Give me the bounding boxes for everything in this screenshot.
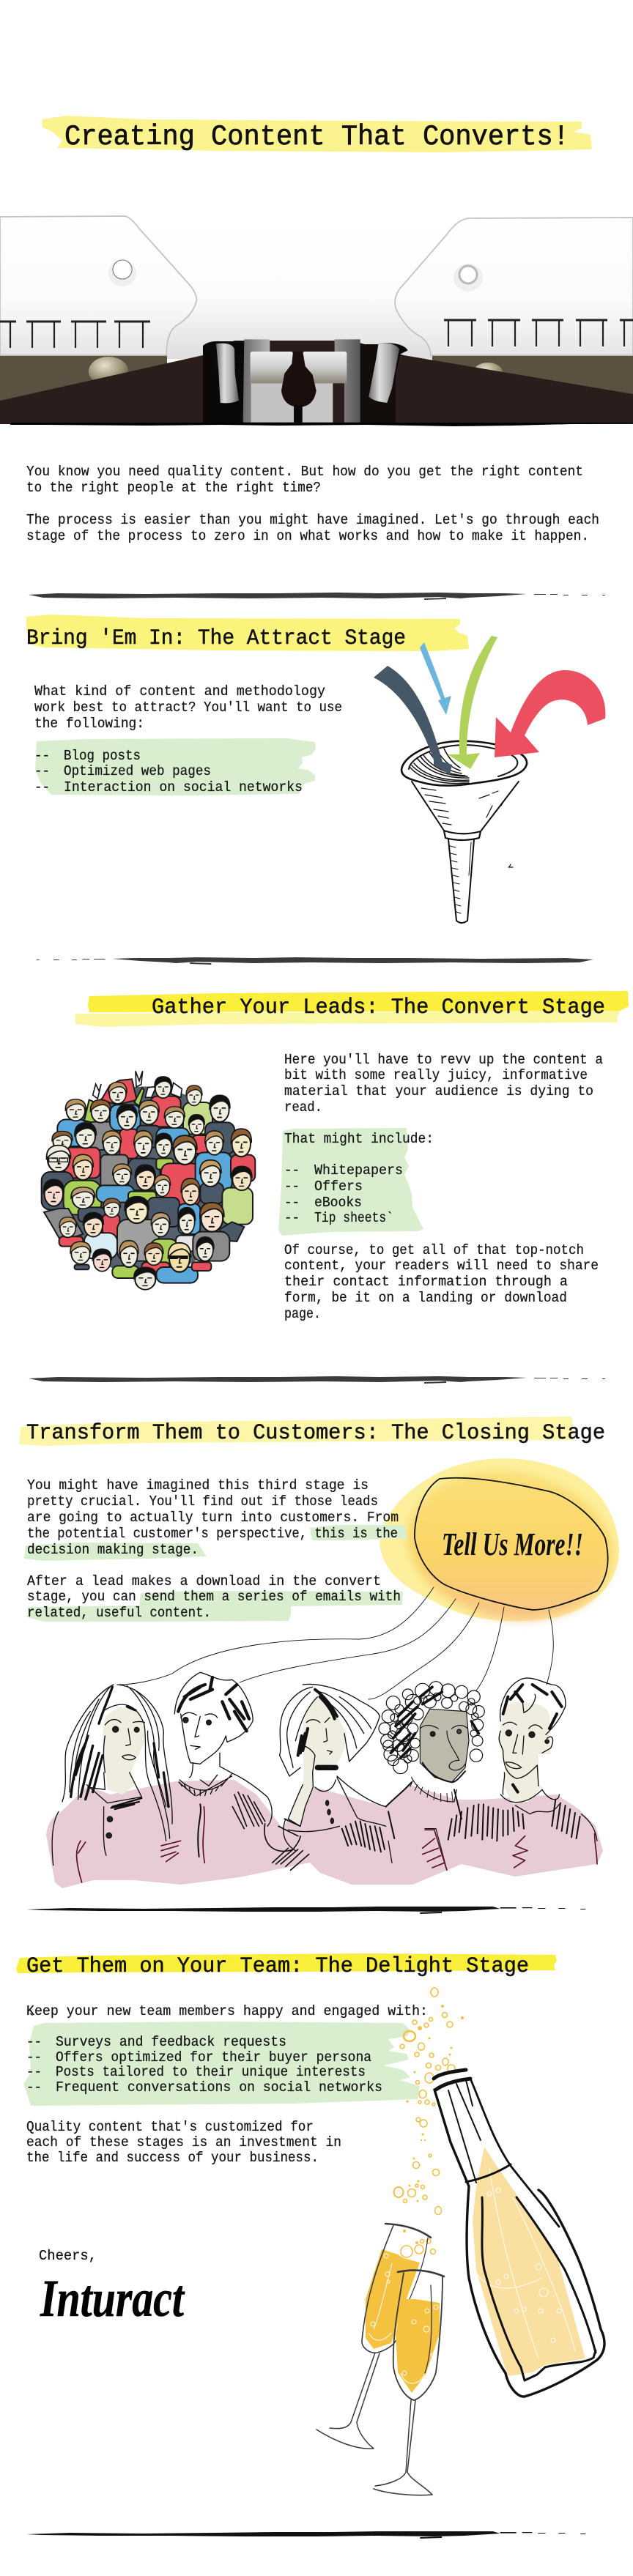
convert closing text: their contact information through a bbox=[284, 1274, 568, 1290]
torn bottom edge bbox=[10, 423, 633, 426]
person 4 bbox=[379, 1682, 484, 1870]
delight list: Offers optimized for their buyer persona bbox=[56, 2049, 371, 2065]
intro text bbox=[26, 464, 599, 544]
convert intro text: bit with some really juicy, informative bbox=[284, 1067, 588, 1083]
connecting lines bbox=[119, 1587, 553, 1699]
arrow: green bbox=[448, 636, 497, 769]
ink ribbon bbox=[0, 341, 633, 424]
heading: closing stage: Transform Them to Customers: The Closing Stage bbox=[26, 1421, 605, 1446]
typewriter photo bbox=[0, 216, 633, 426]
closing intro text bbox=[24, 1477, 407, 1622]
convert intro text: Here you'll have to revv up the content a bbox=[284, 1052, 603, 1068]
group of people bbox=[46, 1587, 603, 1888]
heading: delight stage: Get Them on Your Team: The Delight Stage bbox=[26, 1954, 529, 1979]
convert closing text: content, your readers will need to share bbox=[284, 1258, 599, 1274]
attract list: -- bbox=[34, 763, 50, 779]
glass: back bbox=[316, 2224, 431, 2449]
convert list: Whitepapers bbox=[314, 1162, 403, 1178]
convert list: eBooks bbox=[314, 1195, 362, 1211]
title text: Creating Content That Converts! bbox=[64, 121, 569, 153]
panel: closing stage bbox=[19, 1417, 619, 1888]
sign-off bbox=[39, 2248, 185, 2328]
arrow: red bbox=[495, 670, 605, 757]
closing intro text: After a lead makes a download in the convert bbox=[27, 1573, 381, 1589]
heading: convert stage bbox=[75, 991, 629, 1027]
person 1 bbox=[52, 1685, 181, 1882]
convert closing text: form, be it on a landing or download bbox=[284, 1290, 567, 1306]
delight closing text: each of these stages is an investment in bbox=[26, 2134, 341, 2150]
person 2 bbox=[174, 1672, 300, 1863]
intro text: The process is easier than you might have imagined. Let's go through each bbox=[26, 512, 599, 528]
convert intro text: read. bbox=[284, 1099, 322, 1116]
attract intro text: the following: bbox=[34, 716, 144, 732]
champagne bubbles bbox=[394, 1988, 464, 2257]
intro text: to the right people at the right time? bbox=[26, 480, 321, 496]
panel: attract stage bbox=[26, 615, 605, 923]
arrow: light blue bbox=[420, 642, 451, 715]
arrow: dark blue bbox=[374, 666, 452, 775]
closing intro text: are going to actually turn into customers. From bbox=[27, 1510, 399, 1526]
convert closing text: Of course, to get all of that top-notch bbox=[284, 1242, 584, 1258]
convert list: That might include: bbox=[284, 1131, 434, 1147]
convert closing text bbox=[284, 1242, 599, 1322]
delight list: Frequent conversations on social networks bbox=[56, 2079, 382, 2096]
delight list: Surveys and feedback requests bbox=[56, 2034, 286, 2050]
sign-off: Cheers, bbox=[39, 2248, 97, 2264]
title bbox=[42, 116, 592, 153]
person 3 bbox=[280, 1684, 392, 1863]
convert intro text: material that your audience is dying to bbox=[284, 1083, 593, 1099]
intro text: stage of the process to zero in on what works and how to make it happen. bbox=[26, 528, 589, 544]
attract list: -- bbox=[34, 779, 50, 795]
convert list bbox=[278, 1128, 434, 1236]
right paper guide plate bbox=[395, 218, 633, 355]
panel: convert stage bbox=[42, 991, 629, 1322]
convert list: -- bbox=[284, 1210, 300, 1226]
delight list: -- bbox=[26, 2049, 42, 2065]
delight closing text: the life and success of your business. bbox=[26, 2150, 319, 2166]
intro text: You know you need quality content. But how do you get the right content bbox=[26, 464, 583, 480]
attract list: Optimized web pages bbox=[64, 763, 211, 779]
title highlight bbox=[42, 116, 592, 152]
logo wordmark: Inturact bbox=[40, 2269, 185, 2328]
convert closing text: page. bbox=[284, 1306, 321, 1322]
delight list: -- bbox=[26, 2034, 42, 2050]
delight closing text: Quality content that's customized for bbox=[26, 2119, 314, 2135]
delight closing text bbox=[26, 2119, 341, 2166]
champagne bottle bbox=[434, 2070, 604, 2397]
attract list: Blog posts bbox=[64, 748, 141, 764]
attract intro text: work best to attract? You'll want to use bbox=[34, 699, 342, 716]
glass: front bbox=[374, 2271, 444, 2495]
panel: delight stage bbox=[16, 1953, 604, 2495]
closing intro text: the potential customer's perspective, this is the bbox=[27, 1526, 398, 1542]
attract intro text: What kind of content and methodology bbox=[34, 683, 325, 699]
delight list: Posts tailored to their unique interests bbox=[56, 2064, 366, 2080]
closing intro text: pretty crucial. You'll find out if those leads bbox=[27, 1493, 378, 1510]
speech bubble bbox=[380, 1458, 619, 1621]
convert list: Tip sheets` bbox=[314, 1210, 393, 1226]
brown carriage band bbox=[0, 355, 633, 410]
delight list: ` bbox=[27, 2012, 35, 2028]
heading: attract stage bbox=[26, 615, 469, 651]
funnel bbox=[401, 741, 527, 923]
closing intro text: related, useful content. bbox=[27, 1605, 211, 1621]
convert intro text bbox=[284, 1052, 603, 1116]
closing intro text: You might have imagined this third stage is bbox=[27, 1477, 369, 1493]
champagne illustration bbox=[316, 1988, 604, 2495]
funnel with arrows bbox=[374, 636, 605, 923]
closing intro text: decision making stage. bbox=[27, 1542, 199, 1558]
convert list: -- bbox=[284, 1162, 300, 1178]
delight list: Keep your new team members happy and engaged with: bbox=[26, 2003, 428, 2019]
closing intro text: stage, you can send them a series of emails with bbox=[27, 1589, 401, 1605]
attract list: Interaction on social networks bbox=[64, 779, 303, 795]
crowd illustration bbox=[42, 1071, 255, 1290]
attract intro text bbox=[34, 683, 342, 732]
convert list: -- bbox=[284, 1195, 300, 1211]
pink shirts bbox=[46, 1780, 603, 1888]
attract list bbox=[34, 738, 316, 795]
type guide mechanism bbox=[203, 339, 408, 423]
person 5 bbox=[423, 1678, 597, 1870]
convert list: -- bbox=[284, 1178, 300, 1195]
delight list: -- bbox=[26, 2064, 42, 2080]
attract list: -- bbox=[34, 748, 50, 764]
convert list: Offers bbox=[314, 1178, 363, 1195]
heading: attract stage: Bring 'Em In: The Attract Stage bbox=[26, 626, 406, 651]
left paper guide plate bbox=[0, 216, 196, 355]
delight list: -- bbox=[26, 2079, 42, 2096]
delight list bbox=[23, 2003, 428, 2106]
heading: convert stage: Gather Your Leads: The Convert Stage bbox=[152, 995, 605, 1020]
